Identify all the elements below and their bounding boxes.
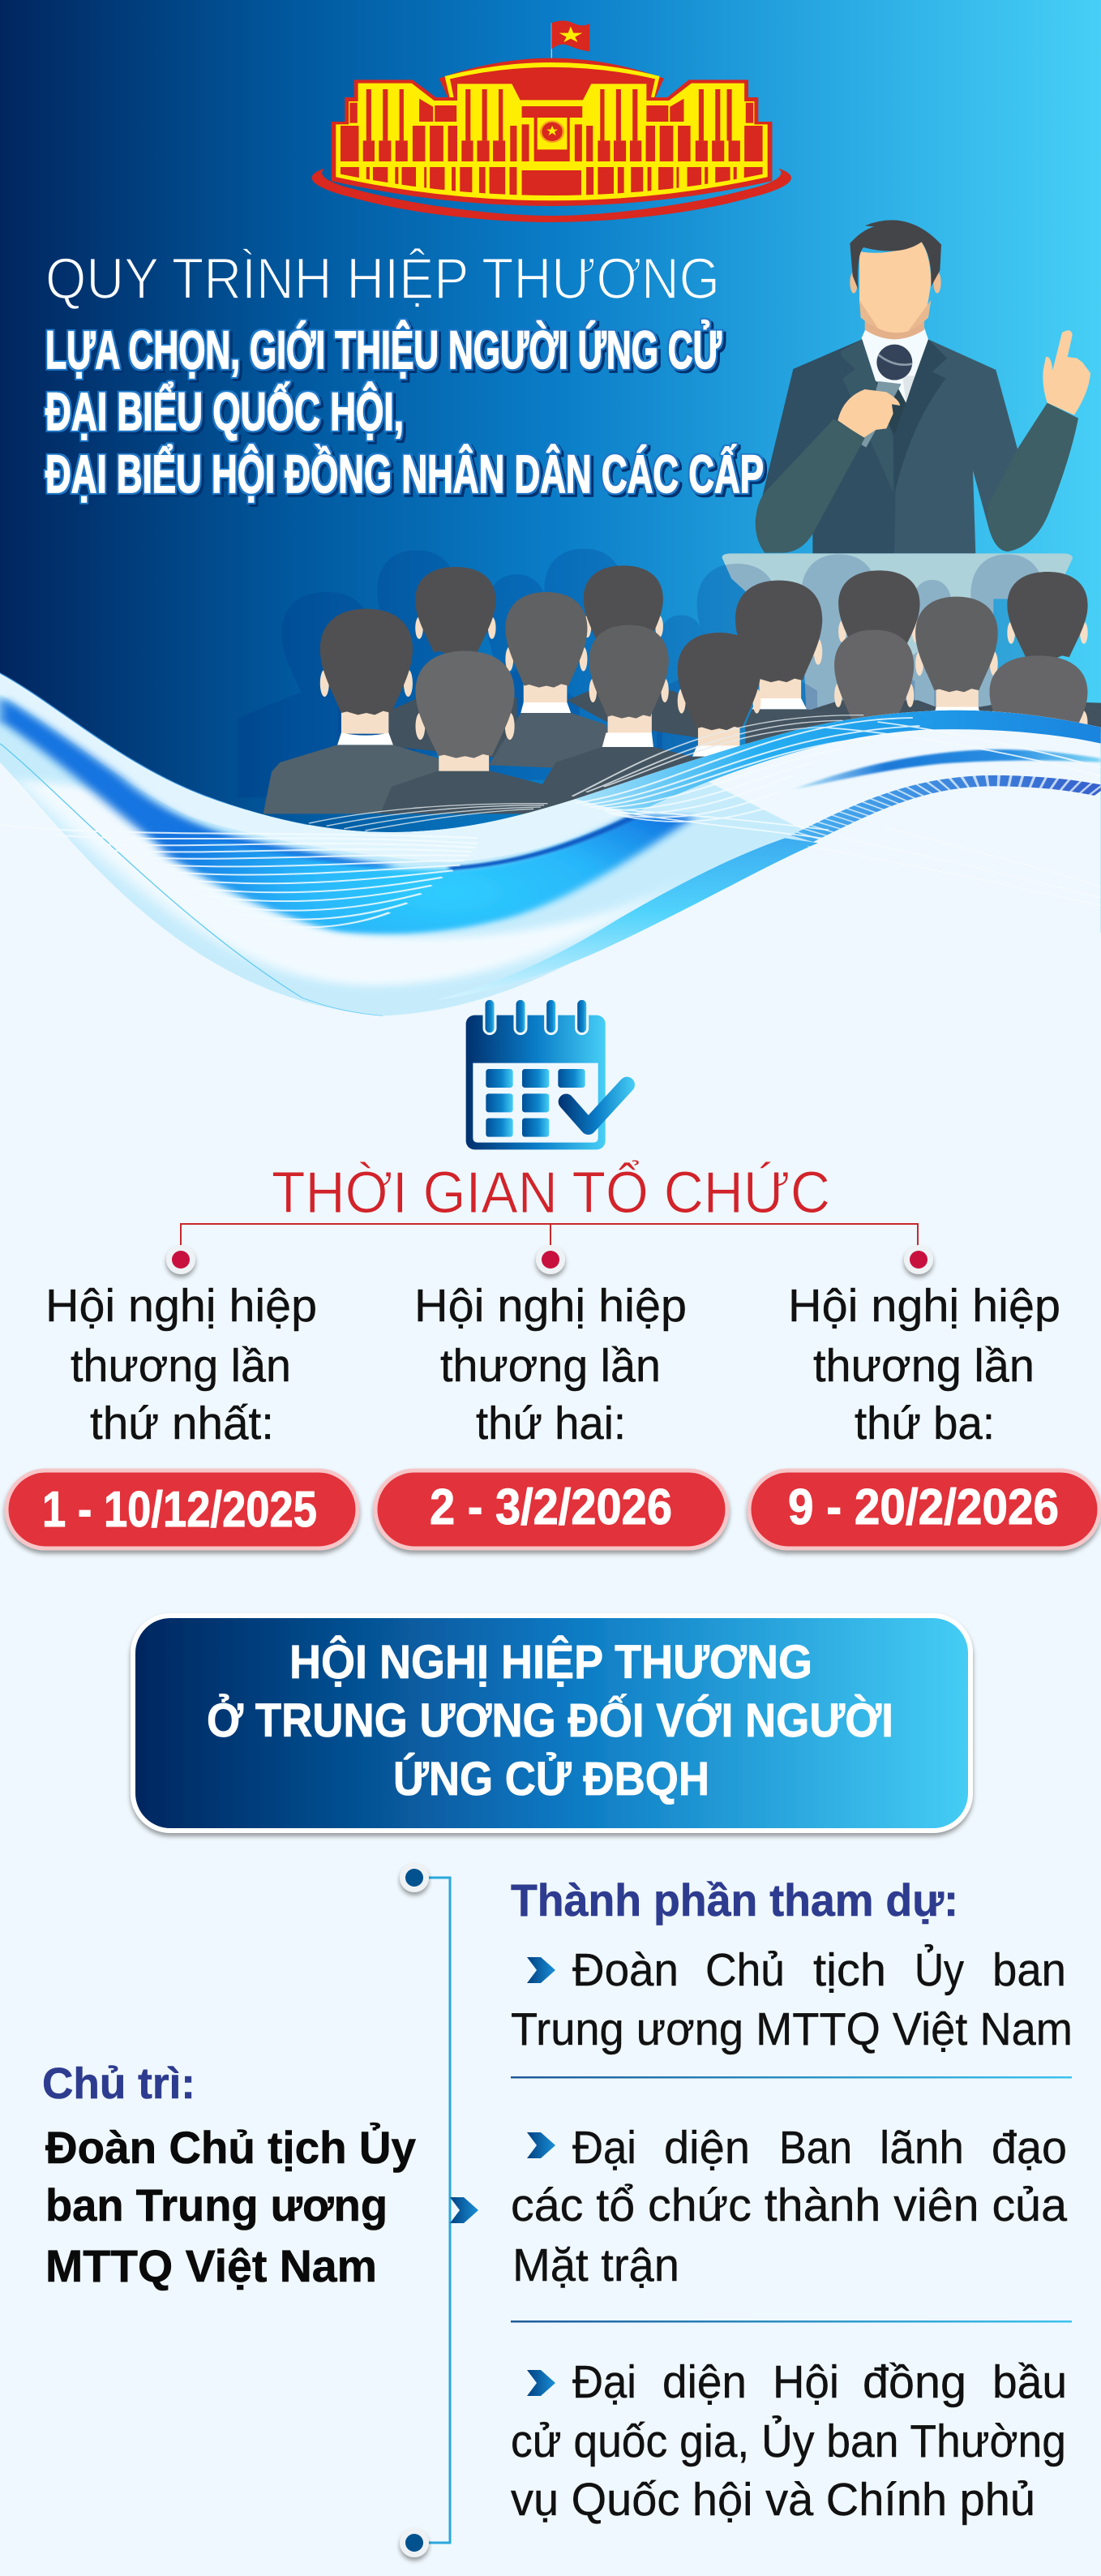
calendar body <box>466 1015 606 1149</box>
date pill 1 <box>6 1470 358 1548</box>
chair name <box>45 2122 416 2291</box>
attendee item 1: ban <box>992 1944 1066 1996</box>
chair name: MTTQ Việt Nam <box>45 2240 377 2291</box>
icon: curved base ring <box>312 168 791 222</box>
attendee item 2 <box>511 2122 1067 2291</box>
title line: thin: QUY TRÌNH HIỆP THƯƠNG <box>45 247 720 311</box>
icon: calendar with check <box>466 998 627 1149</box>
podium <box>722 553 1073 722</box>
attendee item 3: Đại <box>572 2356 636 2408</box>
panel: central conference heading <box>133 1616 970 1831</box>
wave: blue mass <box>151 815 695 934</box>
heading: organising time: THỜI GIAN TỔ CHỨC <box>272 1160 830 1226</box>
wave: white fan lines left <box>60 829 478 928</box>
attendee item 2: các tổ chức thành viên của <box>511 2179 1067 2231</box>
back row bodies <box>388 691 1101 760</box>
column 3 label: thứ ba: <box>855 1397 995 1449</box>
jacket <box>793 339 1017 553</box>
attendee item 1: Đoàn <box>572 1944 679 1996</box>
chair name: Đoàn Chủ tịch Ủy <box>45 2122 416 2173</box>
connector lines <box>181 1224 918 1247</box>
attendee item 1: Chủ <box>705 1944 785 1996</box>
title lines: bold: LỰA CHỌN, GIỚI THIỆU NGƯỜI ỨNG CỬ <box>45 320 722 380</box>
audience member: row two <box>489 581 1087 771</box>
check mark <box>566 1084 627 1127</box>
column 1 label: thứ nhất: <box>90 1397 274 1449</box>
date pill 1: 1 - 10/12/2025 <box>42 1482 317 1538</box>
attendee item 2: Mặt trận <box>512 2239 679 2291</box>
right sleeve <box>987 403 1078 552</box>
heading text: Ở TRUNG ƯƠNG ĐỐI VỚI NGƯỜI <box>207 1694 893 1747</box>
calendar rings <box>484 998 588 1034</box>
hand with mic <box>838 389 900 438</box>
heading text <box>207 1636 893 1805</box>
wave: top right band <box>576 711 1101 814</box>
wave: grey lines over audience <box>309 715 863 831</box>
raised hand <box>1043 330 1090 415</box>
wave: dark inner edge <box>449 816 636 869</box>
attendee item 3: diện <box>662 2356 747 2408</box>
column 2 label: Hội nghị hiệp <box>414 1280 687 1332</box>
audience member: front left <box>263 609 461 814</box>
title lines: bold: ĐẠI BIỂU HỘI ĐỒNG NHÂN DÂN CÁC CẤP <box>45 444 764 504</box>
heading text: HỘI NGHỊ HIỆP THƯƠNG <box>289 1636 812 1689</box>
header background gradient <box>0 0 1101 933</box>
wave: lower light blue band <box>435 838 818 1000</box>
wave: page coloured body <box>0 673 1101 933</box>
title <box>45 247 764 504</box>
wave: inner glow <box>14 779 709 985</box>
attendee item 1: tịch <box>813 1944 886 1996</box>
attendee item 1: Trung ương MTTQ Việt Nam <box>511 2003 1073 2055</box>
attendee item 3: bầu <box>992 2356 1067 2408</box>
speaker at podium <box>756 220 1090 553</box>
column 1 label: thương lần <box>71 1340 291 1392</box>
attendee item 2: lãnh <box>880 2122 964 2174</box>
wave decoration <box>0 673 1101 1016</box>
icon: flag <box>551 20 589 58</box>
wave: hatched band <box>800 781 1101 839</box>
logo: National Assembly building <box>312 20 791 222</box>
column 3 label: Hội nghị hiệp <box>788 1280 1060 1332</box>
wave: faint lines right <box>808 827 1101 906</box>
date pill 3: 9 - 20/2/2026 <box>788 1479 1059 1535</box>
audience silhouettes <box>237 549 1081 797</box>
hair <box>850 220 941 290</box>
column 1 label <box>45 1280 317 1449</box>
column 2 label: thứ hai: <box>476 1397 626 1449</box>
heading text: ỨNG CỬ ĐBQH <box>393 1753 709 1805</box>
column 1 label: Hội nghị hiệp <box>45 1280 317 1332</box>
chair block <box>42 2059 416 2291</box>
bracket connector <box>400 1863 450 2557</box>
shirt and neck <box>862 328 928 403</box>
title lines: bold: ĐẠI BIỂU QUỐC HỘI, <box>45 381 404 441</box>
column 3 label: thương lần <box>813 1340 1035 1392</box>
column 3 label <box>788 1280 1060 1449</box>
attendee item 1 <box>511 1943 1073 2055</box>
column 2 label: thương lần <box>440 1340 661 1392</box>
attendee item 3: cử quốc gia, Ủy ban Thường <box>511 2415 1066 2467</box>
wave: white strip along top edge <box>0 672 632 862</box>
lapels and tie <box>841 339 893 492</box>
microphone <box>862 345 912 448</box>
wave: white fan lines right <box>576 718 1101 838</box>
chair label: Chủ trì: <box>42 2059 195 2108</box>
audience <box>237 549 1101 814</box>
audience member: front centre <box>380 651 562 814</box>
ears <box>850 272 858 294</box>
attendee item 3: Hội <box>773 2356 839 2408</box>
timeline dots <box>166 1245 933 1274</box>
chair name: ban Trung ương <box>45 2179 388 2230</box>
title lines: bold <box>45 320 764 504</box>
left sleeve <box>756 419 865 553</box>
attendee item 2: Ban <box>779 2122 852 2174</box>
date pill 2: 2 - 3/2/2026 <box>430 1479 672 1535</box>
attendee item 2: đạo <box>992 2122 1067 2174</box>
attendees heading: Thành phần tham dự: <box>511 1874 958 1926</box>
attendee item 3: đồng <box>863 2356 966 2408</box>
audience member: row three <box>539 625 760 814</box>
wave: right dark band <box>794 749 1101 789</box>
wave: blue left band <box>0 696 393 878</box>
attendee item 2: Đại <box>572 2122 636 2174</box>
icon: bracket arrow <box>450 2197 478 2223</box>
attendee item 3: vụ Quốc hội và Chính phủ <box>511 2474 1035 2526</box>
wave: pale crescent <box>0 665 815 1015</box>
attendee item 1: Ủy <box>915 1943 964 1996</box>
wave: edge lines <box>0 672 383 1015</box>
date pill 3 <box>749 1470 1099 1548</box>
icon: building <box>332 58 772 206</box>
face <box>859 242 931 333</box>
back row heads <box>415 565 1088 659</box>
date pill 2 <box>375 1470 727 1548</box>
column 2 label <box>414 1280 687 1449</box>
attendee item 3 <box>511 2356 1067 2526</box>
calendar cells <box>486 1069 585 1137</box>
icon: national emblem <box>541 122 563 142</box>
attendee item 2: diện <box>664 2122 750 2174</box>
